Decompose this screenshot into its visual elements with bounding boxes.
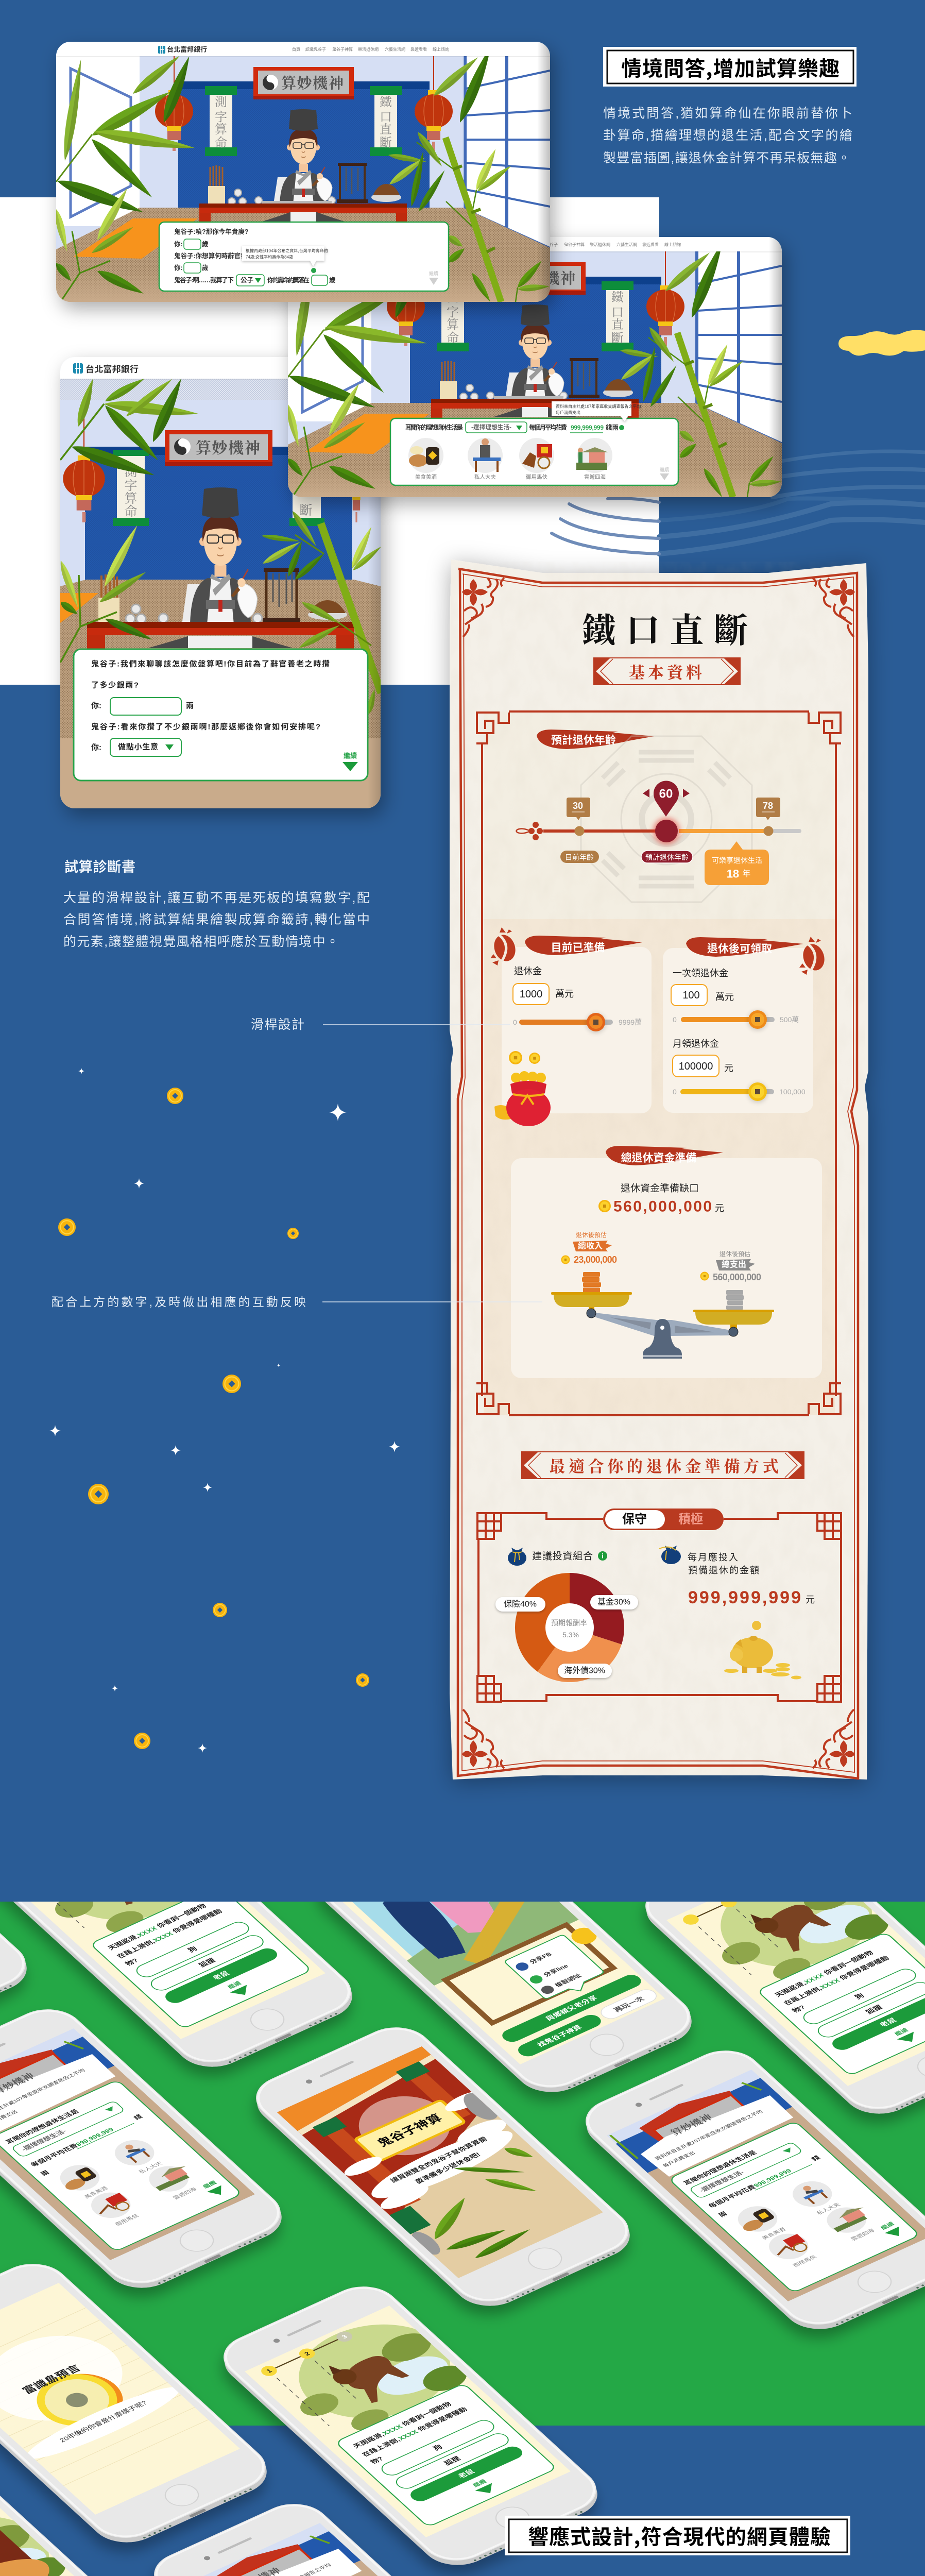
input: 1000: 萬元 — [555, 989, 574, 999]
dialog card: 歲 — [202, 240, 209, 248]
icon: golden piggy bank — [724, 1621, 801, 1680]
phone: life choices (right): 999,999,999 — [752, 2167, 793, 2189]
header text: 認識鬼谷子 — [305, 46, 326, 52]
text block: diagnosis body: 合問答情境,將試算結果繪製成算命籤詩,轉化當中 — [63, 912, 370, 927]
phone: question (top right): 狐狸 — [864, 2004, 884, 2015]
phone: life choices (left): 999,999,999 — [74, 2126, 115, 2147]
balance scale — [551, 1292, 774, 1359]
title: 鐵口直斷: 鐵口直斷 — [582, 603, 748, 652]
banner: 基本資料 — [593, 657, 741, 685]
scroll text: 字 — [447, 302, 459, 319]
icon: info — [598, 1551, 607, 1561]
panel: phone mockups — [0, 1751, 925, 2576]
banner: best retirement plan: 最適合你的退休金準備方式 — [549, 1454, 779, 1477]
scroll text: 鐵 — [380, 92, 392, 109]
phone: life choices (left): 兩 — [39, 2169, 51, 2177]
phone: life choices (left): 每個月平均花費 — [29, 2143, 79, 2168]
label: fund: 基金30% — [597, 1597, 630, 1606]
phone: life choices (left): 雲遊四海 — [172, 2186, 198, 2200]
input: 100000 — [673, 1055, 733, 1077]
title: responsive heading: 響應式設計,符合現代的網頁體驗 — [528, 2520, 831, 2550]
annotation: interactive response: 配合上方的數字,及時做出相應的互動反映 — [52, 1295, 306, 1309]
green band — [0, 1902, 925, 2426]
dialogue lines: 鬼谷子:看來你攢了不少銀兩啊!那麼返鄉後你會如何安排呢? — [91, 722, 320, 732]
dialogue lines: 兩 — [186, 702, 194, 710]
icon labels: 御用馬伕 — [526, 473, 547, 480]
text block: diagnosis heading: 試算診斷書 — [64, 859, 135, 875]
panel: mobile-width screen mockup — [57, 357, 383, 808]
text block: monthly amount: 每月應投入 — [688, 1552, 738, 1563]
dialog card: 你: — [174, 264, 183, 272]
icon: red money bag — [494, 1051, 551, 1126]
phone: dog question: 3 — [340, 2333, 349, 2340]
header text — [167, 45, 449, 54]
card: total retirement funds: 退休資金準備缺口 — [621, 1183, 699, 1194]
phone: life choices (left): 美食美酒 — [82, 2185, 109, 2199]
text block: section one body: 製豐富插圖,讓退休金計算不再呆板無趣。 — [603, 151, 850, 165]
bubble: retirement years: 18 年 — [727, 868, 750, 880]
phone: temple intro (centre): 要準備多少退休金吧! — [414, 2151, 482, 2185]
plaque title: 算妙機神 — [196, 435, 260, 458]
header text: 認識鬼谷子 — [537, 242, 558, 247]
scroll text: 斷 — [380, 132, 392, 150]
scroll text: 斷 — [611, 328, 624, 345]
phone: question (top right): 狗 — [853, 1992, 866, 2001]
scroll text: 算 — [124, 488, 138, 507]
icon: yellow cloud — [838, 330, 925, 355]
scroll text: 鐵 — [611, 286, 624, 305]
phone: share screen: 分享line — [542, 1962, 570, 1978]
phone: life choices (right): 私人大夫 — [815, 2201, 842, 2216]
income side — [561, 1231, 617, 1293]
phone: life choices (left): -選擇理想生活- — [20, 2128, 68, 2153]
phone: question (top left): 繼續 — [226, 1980, 243, 1990]
toggle: conservative / aggressive: 保守 — [622, 1513, 647, 1526]
icon labels: 美食美酒 — [415, 473, 437, 480]
header text: 六藝生活網 — [385, 46, 405, 52]
card: after retirement: 月領退休金 — [673, 1039, 719, 1049]
header text: 樂活退休網 — [358, 46, 379, 52]
icon labels: 雲遊四海 — [584, 473, 606, 480]
dialog card: 鬼谷子:啊……我算了下 — [174, 276, 234, 284]
figure: monthly amount: 999,999,999 — [688, 1588, 801, 1607]
scroll text: 測 — [215, 92, 227, 109]
header text: 鬼谷子神算 — [564, 242, 585, 247]
banner: best retirement plan — [521, 1451, 804, 1479]
dialog card: 歲 — [202, 264, 209, 272]
phone: life choices (left): 御用馬伕 — [113, 2213, 140, 2227]
card: total retirement funds: 總退休資金準備 — [621, 1152, 696, 1164]
input: 100000: 元 — [724, 1063, 733, 1073]
age tag 78: 78 — [763, 801, 773, 811]
header text: 台北富邦銀行 — [399, 241, 439, 248]
label: overseas bond: 海外債30% — [564, 1666, 605, 1675]
scroll text: 斷 — [299, 500, 313, 519]
continue button: 繼續 — [344, 752, 357, 759]
tooltip: 根據內政部104年公布之資料,台灣平均壽命約 — [246, 248, 328, 253]
slider: monthly — [673, 1082, 806, 1102]
phone: life choices (right): 雲遊四海 — [849, 2227, 876, 2242]
decorative coins — [58, 1088, 369, 1749]
dialog card: 錢兩 — [606, 423, 619, 431]
pill labels — [560, 851, 693, 863]
text block: section one body — [603, 106, 852, 165]
phone: temple intro (centre) — [239, 2018, 646, 2315]
title: section one heading: 情境問答,增加試算樂趣 — [621, 52, 840, 82]
plaque title: 算妙機神 — [281, 72, 344, 93]
scroll text: 命 — [447, 328, 459, 345]
header text: 六藝生活網 — [616, 242, 637, 247]
phone: question (top left): 狐狸 — [197, 1957, 217, 1969]
input: 100000: 100000 — [679, 1061, 713, 1072]
scroll text: 口 — [380, 106, 392, 125]
phone: question (top right): 老鼠 — [878, 2016, 898, 2028]
donut chart: 預期報酬率 — [551, 1619, 587, 1627]
icons: life choices — [408, 438, 612, 473]
text block: diagnosis body — [63, 891, 370, 949]
scroll text: 算 — [215, 118, 227, 137]
title: responsive heading — [505, 2516, 850, 2555]
bagua watermark — [581, 736, 752, 902]
expense side — [700, 1250, 761, 1310]
scroll text — [447, 286, 624, 345]
phone: question (top left): 老鼠 — [211, 1970, 231, 1981]
phone: dog question: 狗 — [431, 2444, 444, 2452]
phone: question (top right): 物? — [790, 2004, 807, 2014]
phone: share screen: 分享FB — [528, 1951, 554, 1965]
phone: share screen: 與鄉親父老分享 — [544, 1994, 599, 2022]
expense side: 總支出 — [722, 1259, 746, 1269]
phone: question (top left): 物? — [123, 1957, 140, 1967]
input: 100 — [671, 985, 734, 1006]
header text — [399, 241, 681, 248]
white band — [0, 197, 659, 685]
tooltip: 每戶消費支出 — [556, 410, 580, 415]
scroll text — [215, 92, 392, 150]
phone: coin prophecy — [0, 2255, 283, 2555]
dialog card: 鬼谷子:你想算何時辭官養老? — [174, 252, 258, 260]
dialog card: 999,999,999 — [571, 424, 604, 431]
character — [182, 487, 258, 622]
phone: share screen: 複製網址 — [553, 1972, 583, 1988]
tooltip — [242, 246, 328, 266]
dialogue lines — [91, 659, 330, 752]
phone: temple intro (centre): 讓賀謝雙全的鬼谷子幫你算算需 — [388, 2136, 489, 2184]
section label: 預計退休年齡 — [537, 730, 654, 749]
scroll text: 直 — [611, 314, 624, 332]
phone: question (top right): 天雨路滑,XXXX 你看到一個動物 — [773, 1949, 875, 1998]
input: 100: 100 — [682, 990, 700, 1001]
phone: question (top right): 繼續 — [893, 2027, 910, 2037]
scroll text: 口 — [611, 302, 624, 319]
expense side: 退休後預估 — [720, 1250, 750, 1258]
phone: question (top left): 天雨路滑,XXXX 你看到一個動物 — [106, 1902, 208, 1951]
scroll text: 算 — [447, 314, 459, 332]
slider: lump sum — [673, 1010, 799, 1030]
phone: life choices (right): 耳聞你的理想退休生活是 — [682, 2149, 758, 2187]
dialogue lines: 你: — [91, 743, 101, 752]
phone: dog question: 2 — [303, 2350, 312, 2357]
figure: funding gap: 元 — [715, 1203, 724, 1213]
text block: diagnosis body: 的元素,讓整體視覺風格相呼應於互動情境中。 — [63, 935, 339, 949]
toggle: conservative / aggressive — [603, 1509, 724, 1530]
toggle: conservative / aggressive: 積極 — [678, 1513, 703, 1526]
continue button — [342, 752, 358, 771]
card: current savings: 目前已準備 — [551, 942, 605, 954]
plaque title: 算妙機神 — [513, 267, 575, 289]
phone: life choices (left) — [0, 2000, 298, 2297]
icon: navy pouch — [508, 1548, 526, 1566]
dialog card: -選擇理想生活- — [471, 423, 511, 431]
donut chart — [495, 1573, 638, 1682]
card: after retirement: 退休後可領取 — [707, 943, 772, 955]
tooltip — [552, 401, 641, 421]
income side: 退休後預估 — [576, 1231, 607, 1239]
phone: life choices (left): 耳聞你的理想退休生活是 — [4, 2108, 80, 2145]
dialog card: 公子 — [241, 277, 253, 284]
pill labels: 預計退休年齡 — [645, 853, 689, 861]
banner: 基本資料: 基本資料 — [629, 659, 702, 683]
donut chart: 5.3% — [562, 1631, 579, 1639]
phone: dog question: 天雨路滑,XXXX 你看到一個動物 — [351, 2400, 453, 2449]
income side: 總收入 — [578, 1241, 603, 1251]
phone: market question — [0, 2469, 213, 2576]
header text: 台北富邦銀行 — [167, 45, 207, 54]
phone: life choices (right): 錢 — [810, 2155, 821, 2162]
card: after retirement — [663, 937, 828, 1113]
phone: dog question: 1 — [265, 2368, 273, 2374]
phone: share screen: 雲遊四海 — [472, 1850, 504, 1867]
section label: 預計退休年齡: 預計退休年齡 — [551, 735, 616, 746]
continue button: 繼續 — [660, 467, 669, 472]
slider: monthly: 100,000 — [779, 1088, 806, 1096]
phone: off-canvas corner — [0, 1751, 43, 2048]
phone: life choices (left): 繼續 — [201, 2180, 218, 2190]
phone: life choices (right): 算妙機神 — [667, 2111, 715, 2138]
bank logo: 台北富邦銀行 — [85, 364, 139, 374]
header text: 線上諮詢 — [664, 242, 681, 247]
input: 1000 — [513, 984, 574, 1005]
header text: 靠近看看 — [642, 242, 659, 247]
phone: life choices (right): 美食美酒 — [760, 2226, 787, 2241]
dialogue lines: 了多少銀兩? — [91, 680, 139, 689]
card: current savings: 退休金 — [514, 966, 542, 976]
phone: dog question: 老鼠 — [456, 2468, 476, 2480]
header text: 首頁 — [292, 46, 300, 52]
phone: life choices (right): 繼續 — [879, 2221, 896, 2231]
annotation: slider design: 滑桿設計 — [251, 1018, 304, 1032]
phone: coin prophecy: 富識島預言 — [20, 2363, 83, 2396]
slider: savings: 0 — [513, 1018, 517, 1026]
text block: diagnosis body: 大量的滑桿設計,讓互動不再是死板的填寫數字,配 — [63, 891, 370, 905]
dialog card: 鬼谷子:噴?那你今年貴庚? — [174, 228, 248, 235]
header text: 首頁 — [524, 242, 532, 247]
phone: dog question: 在路上滑倒,XXXX 你覺得是哪種動 — [361, 2405, 469, 2458]
figure: monthly amount: 元 — [806, 1595, 815, 1605]
phone: temple intro (centre): 鬼谷子神算 — [374, 2112, 445, 2149]
dialog card: 歲 — [329, 276, 336, 284]
icon labels — [415, 473, 606, 480]
title: section one heading — [603, 47, 857, 87]
bubble: retirement years — [705, 841, 769, 885]
phone: question (top left): 在路上滑倒,XXXX 你覺得是哪種動 — [115, 1907, 224, 1959]
paper sheet — [450, 560, 868, 1780]
phone: share screen: 找鬼谷子神算 — [536, 2024, 584, 2048]
panel: recommended portfolio frame: 建議投資組合 — [532, 1551, 593, 1562]
header text: 鬼谷子神算 — [332, 46, 353, 52]
icon: info: i — [602, 1552, 604, 1560]
scroll text: 測 — [124, 462, 138, 480]
age tag 30 — [567, 798, 590, 820]
phone: life choices (right): 御用馬伕 — [791, 2254, 818, 2268]
phone: dog question: 狐狸 — [442, 2455, 462, 2467]
panel: paper scroll results — [450, 560, 868, 1780]
header text: 樂活退休網 — [590, 242, 610, 247]
phone: dog question: 繼續 — [471, 2478, 488, 2488]
phone: life choices (right): 兩 — [717, 2210, 729, 2218]
phone: life choices (right): -選擇理想生活- — [697, 2169, 746, 2194]
tooltip: 資料來自主計處107年家庭收支調查報告之平均 — [556, 404, 641, 409]
text block: monthly amount: 預備退休的金額 — [688, 1565, 759, 1575]
phone: dog question: 物? — [368, 2455, 385, 2465]
label: insurance: 保險40% — [504, 1599, 537, 1608]
dialog card — [159, 222, 449, 291]
decorative stars — [49, 1068, 400, 1753]
dialog card: 你: — [174, 240, 183, 248]
scroll text: 字 — [215, 106, 227, 125]
dialog card: 你的壽命約莫落在 — [267, 276, 310, 284]
label: insurance — [495, 1597, 545, 1612]
expense side: 560,000,000 — [713, 1272, 761, 1282]
text block: monthly amount — [688, 1552, 759, 1575]
scroll text: 命 — [215, 132, 227, 150]
phone: coin prophecy: 20年後的你會是什麼樣子呢? — [58, 2399, 149, 2444]
phone: life choices (right): 每戶消費支出 — [661, 2150, 697, 2168]
phone: question (top left): 狗 — [186, 1945, 199, 1954]
phone: share screen — [301, 1804, 708, 2101]
panel: desktop screen mockup with life choices — [284, 237, 782, 499]
tooltip: 74歲;女性平均壽命為84歲 — [246, 255, 293, 260]
header text: 靠近看看 — [410, 46, 427, 52]
panel: desktop screen mockup with age question — [53, 42, 550, 303]
pin 60 — [643, 781, 690, 817]
slider: lump sum: 0 — [673, 1015, 677, 1024]
age tag 30: 30 — [573, 801, 583, 811]
dialogue lines: 鬼谷子:我們來聊聊該怎麼做盤算吧!你目前為了辭官養老之時攢 — [91, 659, 330, 669]
phone: life choices (right): 每個月平均花費 — [707, 2184, 757, 2209]
slider: lump sum: 500萬 — [780, 1015, 799, 1024]
phone: life choices (left): 私人大夫 — [137, 2160, 164, 2175]
phone: life choices (right): 資料來自主計處107年家庭收支調查報告之平均 — [654, 2109, 764, 2161]
dialog card: 每個月平均花費 — [529, 423, 567, 431]
header text: 線上諮詢 — [433, 46, 449, 52]
icon: navy pouch — [659, 1546, 681, 1564]
dialog card: 耳聞你的理想退休生活是 — [405, 423, 463, 431]
scroll text: 字 — [124, 476, 138, 494]
frame — [476, 711, 841, 1415]
phone: question (top left) — [0, 1779, 369, 2076]
dialog card — [390, 418, 678, 485]
card: after retirement: 一次領退休金 — [673, 968, 728, 978]
pin 60: 60 — [659, 787, 673, 801]
phone: question (top right) — [628, 1826, 925, 2123]
text block: section one body: 卦算命,描繪理想的退生活,配合文字的繪 — [603, 128, 852, 143]
card: total retirement funds — [511, 1146, 822, 1378]
phone: share screen: 再玩一次 — [612, 1995, 646, 2013]
phone: life choices (left): 錢 — [132, 2113, 144, 2121]
bubble: retirement years: 可樂享退休生活 — [712, 856, 762, 865]
slider: savings — [513, 1013, 642, 1032]
dialogue lines: 你: — [91, 702, 101, 710]
continue button: 繼續 — [429, 270, 438, 276]
scroll text: 測 — [447, 286, 459, 305]
figure: funding gap: 560,000,000 — [613, 1198, 712, 1215]
text block: section one body: 情境式問答,猶如算命仙在你眼前替你卜 — [603, 106, 852, 121]
label: overseas bond — [558, 1664, 612, 1678]
dialog card — [74, 649, 368, 781]
phone: life choices (bottom) — [137, 2495, 544, 2576]
panel: recommended portfolio frame — [477, 1509, 841, 1702]
slider: savings: 9999萬 — [619, 1018, 642, 1026]
label: fund — [590, 1595, 638, 1609]
phone: question (top right): 在路上滑倒,XXXX 你覺得是哪種動 — [782, 1954, 890, 2006]
phone: dog question — [207, 2277, 614, 2574]
slider: retirement age — [516, 781, 801, 885]
pill labels: 目前年齡 — [565, 853, 594, 861]
scroll text: 命 — [124, 501, 138, 520]
input: 1000: 1000 — [520, 989, 542, 1000]
icon labels: 私人大夫 — [474, 473, 496, 480]
dialogue lines: 做點小生意 — [118, 742, 158, 751]
age tag 78 — [756, 798, 780, 820]
slider: monthly: 0 — [673, 1088, 677, 1096]
continue button — [429, 270, 438, 285]
card: current savings — [490, 927, 652, 1126]
waves — [552, 451, 925, 554]
phone: life choices (right) — [569, 2041, 925, 2338]
ornaments — [462, 578, 855, 1768]
continue button — [660, 467, 669, 480]
input: 100: 萬元 — [715, 992, 734, 1002]
income side: 23,000,000 — [574, 1255, 617, 1265]
scroll text: 直 — [380, 118, 392, 137]
